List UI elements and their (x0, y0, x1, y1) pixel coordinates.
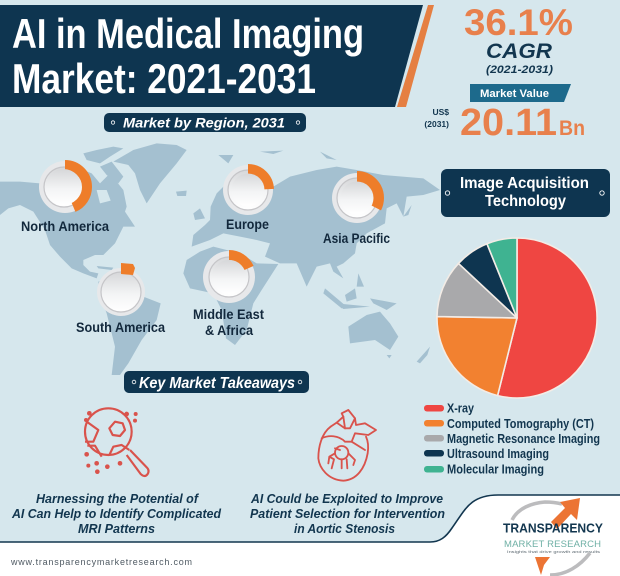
label: North America: North America (21, 219, 109, 234)
donut: Europe (223, 165, 273, 215)
slice: X-ray (498, 238, 597, 398)
icon: magnifier with cells (84, 408, 149, 476)
slice: CT (437, 317, 517, 396)
takeaway text: aortic stenosis: in Aortic Stenosis (294, 521, 395, 536)
label: Europe: Europe (226, 217, 269, 232)
donut: Middle East and Africa (203, 251, 255, 303)
logo arc bottom (550, 553, 590, 575)
legend: X-ray: X-ray (447, 402, 474, 416)
legend (424, 402, 600, 476)
pie chart (437, 238, 597, 398)
takeaway text: MRI patterns: Harnessing the Potential of (36, 491, 200, 506)
CAGR label: CAGR (486, 40, 553, 63)
market value stat (424, 84, 585, 144)
heading: market by region: Market by Region, 2031 (123, 114, 285, 130)
label: South America: South America (76, 320, 165, 335)
currency label (424, 107, 449, 129)
heading: image acquisition technology: Technology (485, 193, 566, 210)
header banner (0, 5, 434, 107)
title (12, 10, 364, 102)
legend: MRI: Magnetic Resonance Imaging (447, 432, 600, 446)
icon: heart (318, 410, 376, 481)
orange slash (397, 5, 434, 107)
banner background (0, 5, 423, 107)
title: AI in Medical Imaging (12, 10, 364, 57)
heading: key market takeaways: Key Market Takeaways (139, 375, 295, 392)
currency label: (2031) (424, 119, 449, 129)
market value unit: Bn (559, 117, 585, 140)
slice: ultrasound (458, 244, 517, 318)
takeaway text: aortic stenosis: Patient Selection for Intervention (250, 506, 445, 521)
slice: molecular (487, 238, 517, 318)
takeaway text: MRI patterns: AI Can Help to Identify Complicated (11, 506, 222, 521)
legend: ultrasound: Ultrasound Imaging (447, 447, 549, 461)
legend: molecular: Molecular Imaging (447, 462, 544, 476)
logo subname: MARKET RESEARCH (504, 539, 601, 550)
market value banner label: Market Value (480, 88, 549, 100)
map: Europe, Africa, Asia, Oceania (183, 151, 440, 363)
market value banner (470, 84, 571, 102)
logo (503, 498, 604, 575)
CAGR value: 36.1% (464, 2, 573, 43)
logo arc top (512, 502, 562, 520)
map: Americas (0, 143, 187, 375)
label: Middle East and Africa: & Africa (205, 323, 253, 338)
donut: South America (97, 263, 145, 316)
logo name: TRANSPARENCY (503, 522, 604, 536)
takeaway text: MRI patterns: MRI Patterns (78, 521, 155, 536)
donut: North America (39, 161, 91, 213)
market value number: 20.11 (460, 102, 557, 144)
legend: CT: Computed Tomography (CT) (447, 417, 594, 431)
CAGR period: (2021-2031) (486, 64, 553, 76)
legend: X-ray (424, 402, 474, 416)
label: Middle East and Africa: Middle East (193, 307, 264, 322)
heading: market by region (104, 113, 306, 132)
logo tagline: Insights that drive growth and results (507, 549, 600, 554)
label: Asia Pacific: Asia Pacific (323, 231, 390, 246)
heading: key market takeaways (124, 371, 309, 393)
label: Middle East and Africa (193, 307, 264, 338)
takeaway text: aortic stenosis: AI Could be Exploited to Improve (250, 491, 443, 506)
slice: MRI (437, 263, 517, 318)
takeaway text: MRI patterns (11, 491, 222, 536)
footer curve line (0, 495, 620, 542)
website url: www.transparencymarketresearch.com (10, 557, 192, 567)
heading: image acquisition technology: Image Acquisition (460, 175, 589, 192)
title: Market: 2021-2031 (12, 55, 316, 102)
heading: image acquisition technology (441, 169, 610, 217)
logo arrow up (551, 498, 580, 529)
CAGR stat (464, 2, 573, 76)
currency label: US$ (432, 107, 449, 117)
donut: Asia Pacific (332, 173, 382, 223)
logo arrow down (535, 557, 550, 575)
world map (0, 143, 440, 375)
takeaway text: aortic stenosis (250, 491, 445, 536)
